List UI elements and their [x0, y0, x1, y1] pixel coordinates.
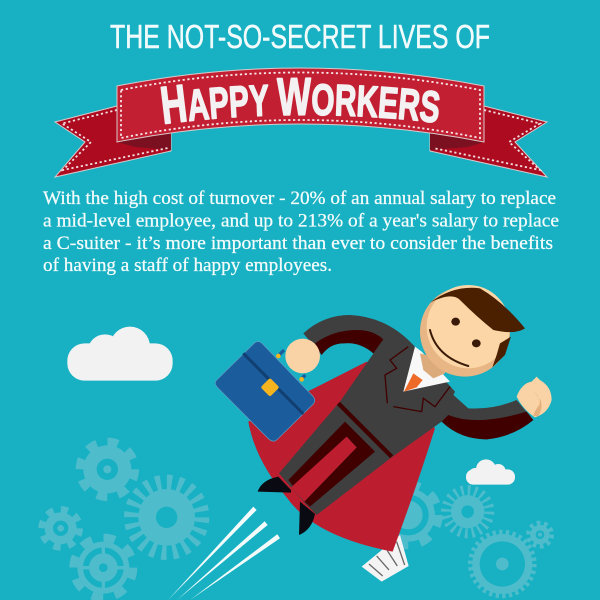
icon: fist: [517, 377, 552, 417]
body text: a mid-level employee, and up to 213% of a year's salary to replace: [43, 212, 559, 232]
neck and shirt: [403, 347, 450, 392]
jacket: [338, 342, 455, 457]
gears: lower right: [378, 485, 552, 596]
back arm: [303, 315, 413, 355]
speed lines: [168, 507, 280, 600]
banner: [54, 68, 548, 178]
cloud: large: [67, 327, 173, 381]
icon: briefcase: [215, 341, 315, 441]
head: [420, 285, 525, 377]
title: THE NOT-SO-SECRET LIVES OF: [110, 18, 490, 55]
banner left tail: [55, 106, 171, 177]
cloud: small: [466, 459, 515, 485]
body text: With the high cost of turnover - 20% of an annual salary to replace: [43, 189, 556, 209]
forward arm: [442, 393, 533, 439]
flying businessman: [215, 285, 552, 582]
banner right tail: [430, 106, 547, 177]
shoes: [258, 477, 315, 535]
legs: [279, 403, 393, 515]
body text: a C-suiter - it’s more important than ever to consider the benefits: [43, 234, 553, 254]
banner text: [163, 115, 440, 124]
icon: hand holding case: [285, 339, 320, 373]
body text: of having a staff of happy employees.: [43, 256, 332, 276]
banner fold shadows: [117, 133, 484, 150]
gears: lower left: [42, 442, 202, 598]
cape: [248, 362, 435, 552]
body text: [43, 189, 559, 276]
banner main band: [117, 68, 484, 142]
banner: HAPPY WORKERS: [160, 77, 440, 124]
paper: [362, 535, 409, 582]
